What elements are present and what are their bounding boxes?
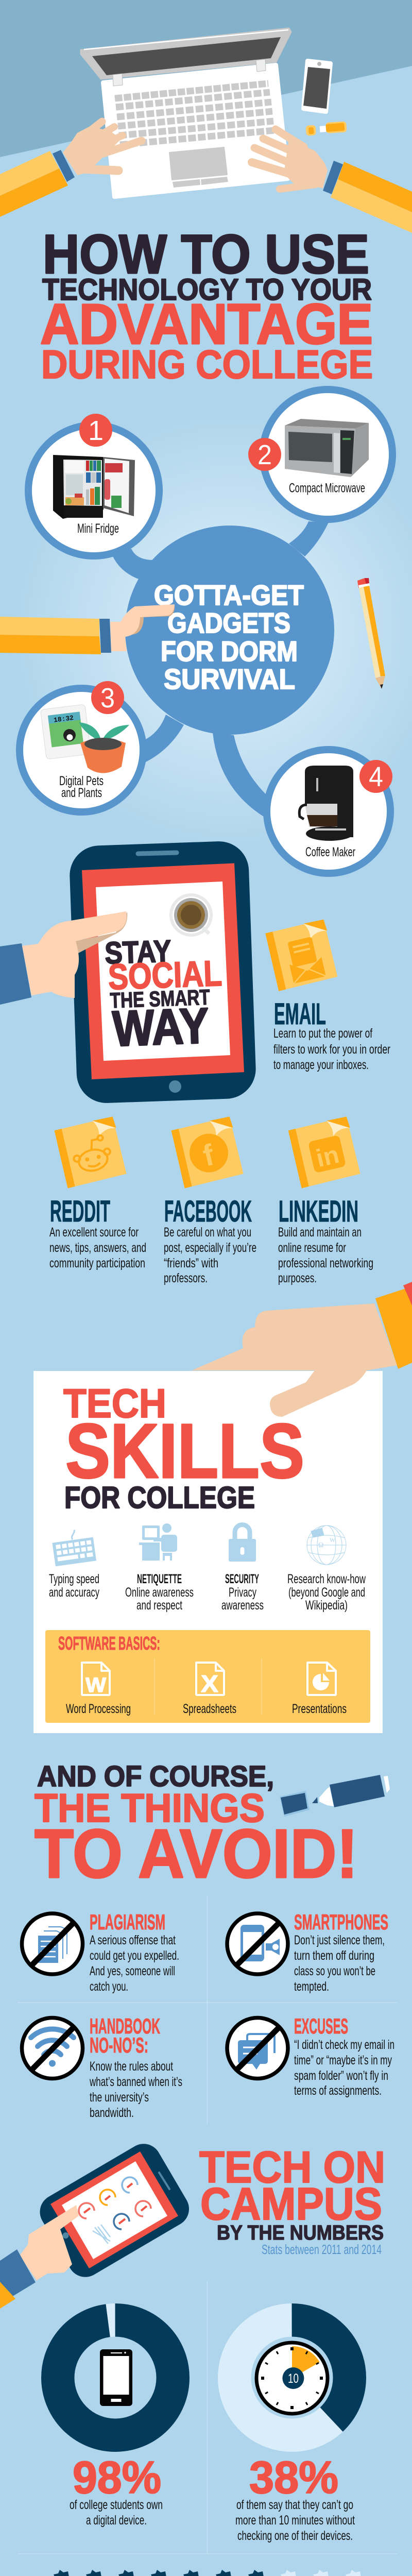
icon: linkedin book xyxy=(288,1116,360,1188)
item: handbook no-nos xyxy=(22,2014,182,2120)
item: reddit: REDDIT xyxy=(50,1195,110,1228)
icon: ten-minute clock xyxy=(256,2343,328,2414)
description xyxy=(89,2059,182,2120)
description: tempted. xyxy=(294,1979,329,1994)
stat: 98 percent own a device: 98% xyxy=(73,2452,161,2503)
skill: typing: and accuracy xyxy=(49,1585,99,1600)
grid dividers xyxy=(18,1895,397,2124)
illustration: pencil xyxy=(357,578,385,689)
icon: marker xyxy=(280,1775,390,1817)
number badge: 4 xyxy=(359,760,392,793)
description: bandwidth. xyxy=(90,2106,134,2120)
circle: gadget hub xyxy=(125,526,334,735)
illustration: hand and tablet xyxy=(0,2138,196,2309)
circle: gadget hub: GADGETS xyxy=(167,607,290,639)
description: community participation xyxy=(49,1256,145,1270)
item: plagiarism: PLAGIARISM xyxy=(90,1910,165,1934)
illustration: hand on tablet xyxy=(0,911,127,1005)
skill: netiquette: Online awareness xyxy=(125,1585,194,1600)
title: DURING COLLEGE xyxy=(41,342,373,387)
heading: stay social the smart way: THE SMART xyxy=(110,985,211,1012)
description: post, especially if you’re xyxy=(164,1241,256,1255)
icon: wikipedia globe: W xyxy=(330,1536,336,1544)
description xyxy=(294,2038,394,2098)
item: spreadsheets: Spreadsheets xyxy=(183,1702,236,1716)
label: Coffee Maker xyxy=(305,845,355,859)
skill: security: Privacy xyxy=(229,1585,256,1600)
description: of college students own xyxy=(70,2498,163,2512)
item: presentations: Presentations xyxy=(292,1702,347,1716)
icon: no excuses chat xyxy=(227,2018,288,2078)
description: what’s banned when it’s xyxy=(89,2075,182,2089)
item: email: EMAIL xyxy=(274,997,326,1031)
description: An excellent source for xyxy=(49,1225,139,1240)
description: Build and maintain an xyxy=(278,1225,362,1240)
illustration: digital pet: 18:32 xyxy=(53,714,74,724)
description: “friends” with xyxy=(164,1256,218,1270)
item: word processing: Word Processing xyxy=(66,1702,131,1716)
illustration: left arm and hand xyxy=(0,122,142,217)
number badge: 3: 3 xyxy=(100,683,115,714)
description: professors. xyxy=(164,1271,208,1285)
title: ADVANTAGE xyxy=(40,293,373,356)
item: word processing: W xyxy=(85,1674,106,1697)
description xyxy=(294,1933,385,1994)
description xyxy=(164,1225,256,1285)
illustration: pointing hand xyxy=(192,1282,412,1417)
section: things to avoid xyxy=(18,1760,397,2124)
item: excuses: EXCUSES xyxy=(294,2014,348,2038)
icon: coffee cup xyxy=(169,893,213,937)
dividers xyxy=(18,2281,397,2576)
description: a digital device. xyxy=(86,2513,147,2528)
panel: software basics: SOFTWARE BASICS: xyxy=(58,1633,160,1654)
heading: BY THE NUMBERS xyxy=(217,2222,384,2244)
description: the university’s xyxy=(90,2090,149,2105)
section: header xyxy=(0,0,412,387)
stat: 98 percent own a device xyxy=(58,2320,173,2528)
stat: online students pictogram xyxy=(43,2570,363,2576)
description xyxy=(49,1225,146,1270)
gadget: coffee maker xyxy=(267,750,392,873)
heading: stay social the smart way: SOCIAL xyxy=(108,953,222,997)
skill: typing xyxy=(49,1528,99,1600)
description: And yes, someone will xyxy=(90,1964,175,1978)
number badge: 1: 1 xyxy=(88,415,104,446)
item: spreadsheets xyxy=(183,1663,236,1716)
illustration: right arm and hand xyxy=(252,129,412,233)
heading xyxy=(35,1760,358,1892)
number badge: 4: 4 xyxy=(369,761,383,792)
icon: no plagiarism xyxy=(22,1913,82,1974)
label: Mini Fridge xyxy=(77,521,119,536)
skill: research: Wikipedia) xyxy=(305,1598,348,1613)
circle: gadget hub: FOR DORM xyxy=(161,635,298,667)
donut chart: 38% xyxy=(234,2320,350,2435)
illustration: solar plant xyxy=(79,722,129,773)
item: reddit xyxy=(49,1116,146,1270)
label: Digital Pets xyxy=(59,774,104,788)
section: tech on campus xyxy=(0,2138,397,2576)
item: linkedin xyxy=(278,1116,373,1285)
description xyxy=(273,1026,390,1072)
label xyxy=(59,774,104,800)
description: news, tips, answers, and xyxy=(49,1241,146,1255)
description: Be careful on what you xyxy=(164,1225,251,1240)
heading: THE THINGS xyxy=(35,1785,265,1831)
panel: tech skills xyxy=(33,1282,412,1733)
heading: SKILLS xyxy=(65,1408,304,1494)
circle: gadget hub: GOTTA-GET xyxy=(154,579,304,611)
icon: reddit book xyxy=(55,1116,127,1188)
icon: ten-minute clock: 10 xyxy=(288,2371,299,2386)
item: plagiarism xyxy=(22,1910,179,1994)
description xyxy=(278,1225,373,1285)
skill: netiquette: NETIQUETTE xyxy=(137,1572,182,1586)
item: word processing xyxy=(66,1663,131,1716)
item: spreadsheets: X xyxy=(201,1670,218,1697)
skill: research: Research know-how xyxy=(287,1572,366,1586)
description: catch you. xyxy=(90,1979,128,1994)
illustration: laptop xyxy=(81,28,291,197)
icon: wikipedia globe: Ω xyxy=(318,1541,323,1549)
skill: research: (beyond Google and xyxy=(288,1585,365,1600)
description: Know the rules about xyxy=(90,2059,173,2074)
description: more than 10 minutes without xyxy=(235,2513,355,2528)
icon: person at computer xyxy=(139,1523,177,1561)
title xyxy=(40,223,373,387)
description: turn them off during xyxy=(294,1948,374,1963)
item: excuses xyxy=(227,2014,394,2098)
item: facebook: FACEBOOK xyxy=(164,1195,252,1228)
section: dorm gadgets xyxy=(0,389,412,881)
heading: TECH xyxy=(63,1380,166,1426)
icon: wikipedia globe xyxy=(307,1526,346,1565)
description: checking one of their devices. xyxy=(237,2529,353,2543)
heading xyxy=(199,2143,385,2257)
illustration: fridge xyxy=(53,455,135,519)
panel: software basics xyxy=(45,1630,370,1723)
heading: stay social the smart way: STAY xyxy=(104,934,172,971)
number badge: 1 xyxy=(79,414,112,447)
number badge: 2: 2 xyxy=(258,439,272,470)
heading: FOR COLLEGE xyxy=(64,1481,255,1515)
gadget: digital pets and plants xyxy=(20,681,143,812)
description: purposes. xyxy=(278,1271,317,1285)
icon: no wifi xyxy=(22,2018,82,2078)
illustration: coffee maker xyxy=(299,766,353,841)
description xyxy=(70,2498,163,2528)
stat: 38 percent check devices xyxy=(234,2320,355,2543)
heading: TECH ON xyxy=(199,2143,385,2192)
gadget: mini fridge xyxy=(28,414,159,556)
icon: no smartphones xyxy=(227,1913,288,1974)
background desk shadow xyxy=(0,0,412,157)
description: of them say that they can’t go xyxy=(236,2498,353,2512)
icon: email book xyxy=(265,920,337,991)
skill: security xyxy=(221,1525,264,1613)
heading: CAMPUS xyxy=(200,2178,382,2229)
gadget: compact microwave xyxy=(248,389,392,519)
title: TECHNOLOGY TO YOUR xyxy=(42,273,372,307)
pictogram: 7 of 10 students xyxy=(43,2570,363,2576)
description xyxy=(90,1933,179,1994)
item: handbook no-nos: NO-NO’S: xyxy=(90,2033,148,2057)
skill: netiquette: and respect xyxy=(136,1598,182,1613)
circle: gadget hub: SURVIVAL xyxy=(164,663,295,695)
connectors to gadget circles xyxy=(113,521,329,817)
donut chart: 98% xyxy=(58,2320,173,2435)
title: HOW TO USE xyxy=(43,223,369,285)
background glow xyxy=(0,402,412,881)
description: to manage your inboxes. xyxy=(273,1058,369,1072)
illustration: pointing hand xyxy=(0,604,175,654)
item: facebook xyxy=(164,1116,256,1285)
item: email xyxy=(265,920,390,1072)
label: and Plants xyxy=(61,786,102,800)
heading: stay social the smart way: WAY xyxy=(112,997,210,1057)
section: stay social xyxy=(0,840,390,1285)
item: handbook no-nos: HANDBOOK xyxy=(90,2014,160,2038)
item: presentations xyxy=(292,1663,347,1716)
skill: security: awareness xyxy=(221,1598,264,1613)
skill: research xyxy=(287,1526,366,1613)
heading: stay social the smart way xyxy=(104,932,225,1057)
number badge: 2 xyxy=(248,438,281,471)
skill: netiquette xyxy=(125,1523,194,1613)
icon: linkedin book: in xyxy=(314,1141,342,1173)
skill: typing: Typing speed xyxy=(49,1572,99,1586)
description: could get you expelled. xyxy=(90,1948,179,1963)
description xyxy=(235,2498,355,2543)
icon: smartphone xyxy=(303,61,331,112)
illustration: digital pet xyxy=(40,704,91,759)
icon: facebook book xyxy=(171,1116,244,1188)
stat: 38 percent check devices: 38% xyxy=(249,2452,338,2503)
illustration: tablet xyxy=(68,840,257,1104)
description: online resume for xyxy=(278,1241,346,1255)
item: smartphones xyxy=(227,1910,388,1994)
number badge: 3 xyxy=(91,681,124,714)
illustration: microwave xyxy=(285,419,369,477)
card background xyxy=(33,1371,383,1733)
skill: security: SECURITY xyxy=(225,1572,259,1586)
icon: padlock xyxy=(229,1525,256,1562)
description: A serious offense that xyxy=(90,1933,176,1947)
heading: TO AVOID! xyxy=(35,1816,358,1892)
heading xyxy=(63,1380,304,1515)
icon: keyboard xyxy=(51,1528,96,1566)
icon: usb stick xyxy=(305,121,347,136)
icon: facebook book: f xyxy=(200,1138,217,1173)
label: Compact Microwave xyxy=(289,481,365,496)
description: professional networking xyxy=(278,1256,373,1270)
heading: AND OF COURSE, xyxy=(37,1760,274,1793)
